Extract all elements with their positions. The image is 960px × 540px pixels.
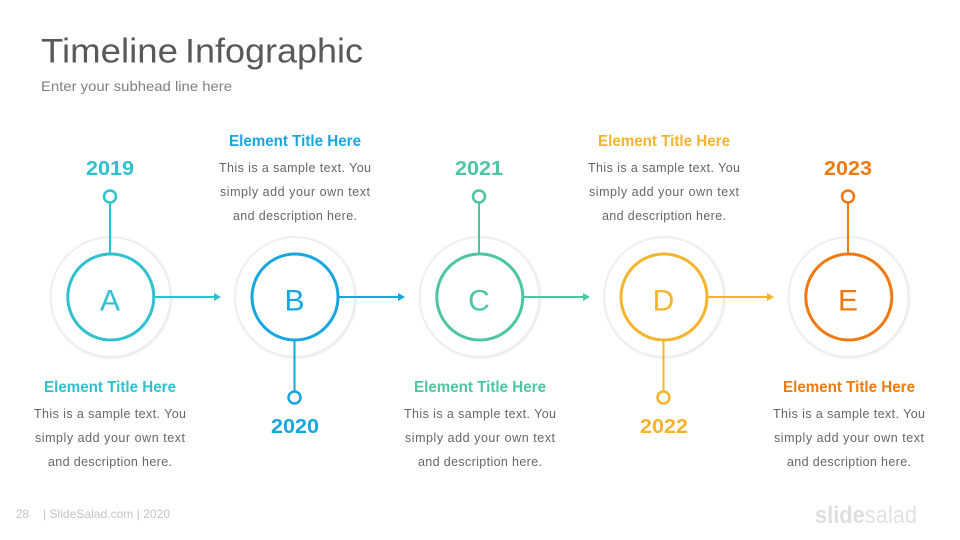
text block D: simply add your own text: [589, 185, 740, 199]
arrow D to E: [708, 293, 774, 301]
arrow B to C: [339, 293, 405, 301]
node D: D: [653, 284, 674, 318]
node A: A: [100, 284, 120, 318]
text block E: Element Title Here: [783, 379, 915, 396]
text block E: This is a sample text. You: [773, 407, 925, 421]
node B: B: [284, 284, 305, 318]
step C: [404, 158, 590, 469]
step A: [34, 158, 221, 469]
step E: [773, 158, 925, 469]
text block D: and description here.: [602, 209, 726, 223]
subhead: Enter your subhead line here: [41, 78, 232, 94]
node E: E: [838, 284, 858, 318]
node B: [235, 237, 355, 357]
text block D: [588, 133, 740, 223]
text block C: simply add your own text: [405, 431, 556, 445]
pin connector A: [104, 190, 116, 253]
node D: [604, 237, 724, 357]
year 2023: 2023: [824, 158, 872, 180]
text block C: and description here.: [418, 455, 542, 469]
title: Timeline: [41, 32, 178, 70]
text block C: Element Title Here: [414, 379, 546, 396]
footer page number: 28: [16, 507, 29, 521]
text block B: simply add your own text: [220, 185, 371, 199]
text block A: This is a sample text. You: [34, 407, 186, 421]
text block A: Element Title Here: [44, 379, 176, 396]
node A: [51, 237, 170, 357]
text block C: This is a sample text. You: [404, 407, 556, 421]
text block B: [219, 133, 371, 223]
year 2022: 2022: [640, 416, 688, 438]
title: [41, 32, 363, 70]
node C: [420, 237, 539, 357]
text block A: simply add your own text: [35, 431, 186, 445]
year 2019: 2019: [86, 158, 134, 180]
footer source: | SlideSalad.com | 2020: [43, 507, 170, 521]
text block E: [773, 379, 925, 469]
arrow A to B: [155, 293, 221, 301]
pin connector D: [658, 341, 670, 404]
text block B: and description here.: [233, 209, 357, 223]
text block B: This is a sample text. You: [219, 161, 371, 175]
text block A: [34, 379, 186, 469]
title: Infographic: [185, 32, 363, 70]
text block C: [404, 379, 556, 469]
step D: [588, 133, 774, 438]
node C: C: [468, 284, 490, 318]
year 2020: 2020: [271, 416, 319, 438]
node E: [789, 237, 908, 357]
year 2021: 2021: [455, 158, 503, 180]
text block A: and description here.: [48, 455, 172, 469]
text block D: Element Title Here: [598, 133, 730, 150]
pin connector E: [842, 190, 854, 253]
step B: [219, 133, 405, 438]
pin connector C: [473, 190, 485, 253]
pin connector B: [288, 341, 300, 404]
text block B: Element Title Here: [229, 133, 361, 150]
arrow C to D: [524, 293, 590, 301]
text block E: simply add your own text: [774, 431, 925, 445]
logo: slidesalad: [815, 502, 917, 529]
text block E: and description here.: [787, 455, 911, 469]
text block D: This is a sample text. You: [588, 161, 740, 175]
